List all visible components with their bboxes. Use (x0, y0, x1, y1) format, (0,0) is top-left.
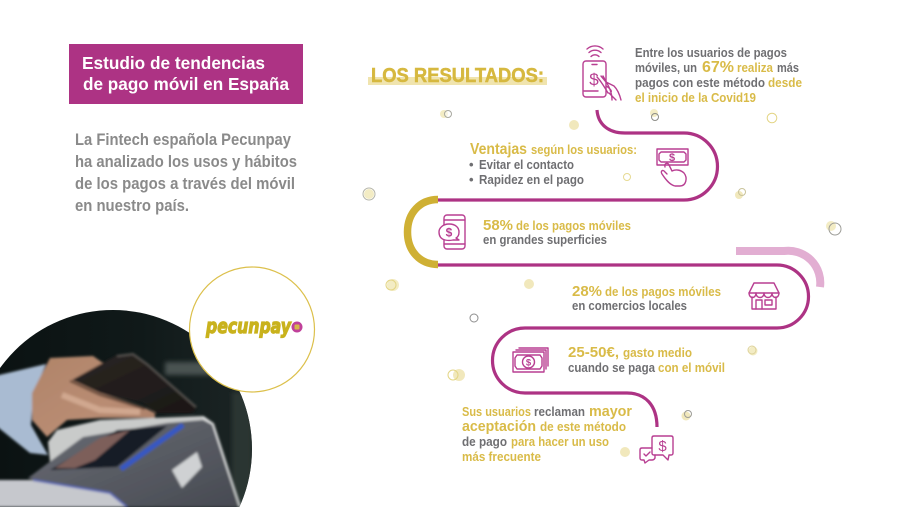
step 6 text: reclaman (534, 404, 585, 419)
step 6 icon: chat bubbles: $ (658, 438, 667, 455)
step 6 text: más frecuente (462, 449, 541, 464)
step 6 text: mayor (589, 404, 632, 420)
step 1 text: Entre los usuarios de pagos (635, 45, 787, 60)
intro paragraph: de los pagos a través del móvil (75, 175, 295, 193)
step 5 text: con el móvil (658, 360, 725, 375)
accent arc: gold (408, 200, 438, 264)
step 5 icon: banknotes: $ (526, 358, 532, 368)
heading: los resultados: LOS RESULTADOS: (371, 65, 544, 87)
title banner: Estudio de tendencias (82, 53, 265, 73)
step 1 text: 67% (702, 59, 734, 76)
step 1 text: pagos con este método (635, 75, 765, 90)
step 5 icon: banknotes (513, 348, 548, 372)
step 4 text (572, 284, 721, 313)
step 2 text: ventajas: Evitar el contacto (479, 157, 574, 172)
step 6 text: Sus usuarios (462, 404, 531, 419)
step 5 text (568, 345, 725, 375)
intro paragraph: La Fintech española Pecunpay (75, 131, 292, 149)
decorative dots (363, 109, 841, 457)
photo: hand paying with a phone at a card terminal (0, 310, 252, 507)
step 6 text: de pago (462, 434, 507, 449)
step 6 icon: chat bubbles (640, 436, 673, 463)
step 4 text: de los pagos móviles (605, 284, 721, 299)
step 2 text: ventajas: Ventajas (470, 141, 527, 158)
winding path (438, 110, 809, 427)
step 2 text: ventajas: Rapidez en el pago (479, 172, 584, 187)
intro paragraph: ha analizado los usos y hábitos (75, 153, 297, 171)
step 1 icon: phone with wifi (583, 46, 621, 100)
step 1 icon: phone with wifi: $ (589, 70, 599, 89)
logo wordmark: pecunpay (205, 314, 292, 338)
intro paragraph: en nuestro país. (75, 197, 189, 215)
title banner: de pago móvil en España (83, 74, 289, 94)
step 4 text: 28% (572, 284, 602, 300)
step 6 text (462, 404, 632, 464)
step 3 text: 58% (483, 218, 513, 234)
step 1 text: más (777, 60, 799, 75)
step 2 icon: bill and hand (657, 149, 688, 186)
step 4 text: en comercios locales (572, 298, 687, 313)
step 5 text: 25-50€, (568, 345, 619, 361)
step 1 text: desde (768, 75, 802, 90)
step 4 icon: shop (749, 283, 779, 309)
step 3 text: de los pagos móviles (516, 218, 631, 233)
logo circle (190, 267, 314, 392)
step 2 text: ventajas: • (469, 172, 474, 187)
step 6 text: aceptación (462, 419, 536, 435)
step 1 text: el inicio de la Covid19 (635, 90, 756, 105)
step 5 text: gasto medio (623, 345, 692, 360)
step 3 text: en grandes superficies (483, 232, 607, 247)
step 3 icon: phone with speech bubble: $ (446, 226, 453, 240)
step 2 icon: bill and hand: $ (669, 152, 675, 164)
step 3 text (483, 218, 631, 247)
step 2 text: ventajas: según los usuarios: (531, 142, 637, 157)
step 1 text: móviles, un (635, 60, 697, 75)
step 1 text: realiza (737, 60, 774, 75)
step 3 icon: phone with speech bubble (439, 215, 465, 249)
title banner (69, 44, 303, 104)
step 6 text: para hacer un uso (511, 434, 609, 449)
step 5 text: cuando se paga (568, 360, 656, 375)
logo dot (292, 322, 302, 332)
step 2 text: ventajas (469, 141, 637, 187)
intro paragraph (75, 131, 297, 215)
step 2 text: ventajas: • (469, 157, 474, 172)
step 1 text (635, 45, 802, 105)
step 6 text: de este método (540, 419, 626, 434)
accent arc: pale pink (736, 251, 820, 287)
